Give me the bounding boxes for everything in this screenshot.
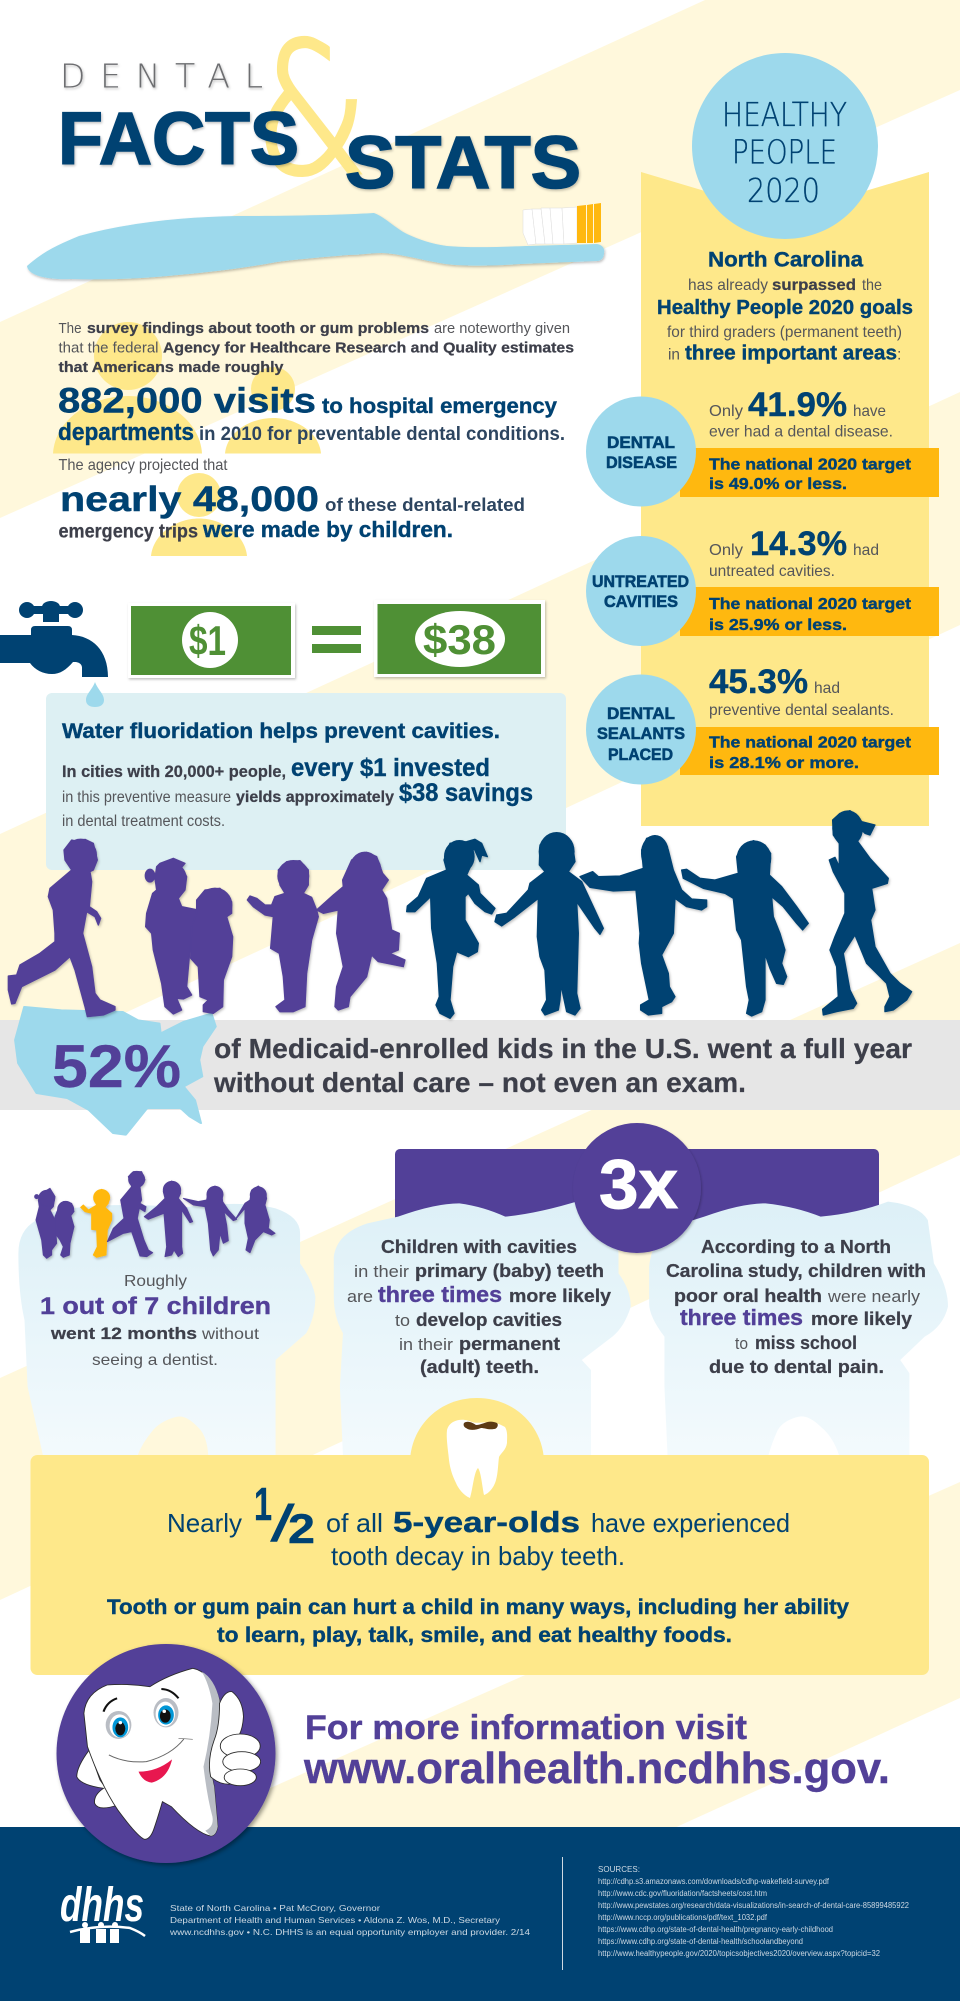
stat row: dental disease: DENTAL: [607, 433, 675, 452]
mascot left arm: [77, 1750, 118, 1808]
call to action: more information: For more information visit: [305, 1709, 747, 1747]
stat row: dental sealants placed: The national 2020 target: [709, 734, 912, 752]
grey band: [0, 1020, 960, 1110]
silhouette: small child: [191, 888, 233, 1013]
text block: survey findings intro: to hospital emergency: [322, 395, 557, 418]
panel: water fluoridation: every $1 invested: [291, 754, 490, 782]
stat: 52 percent Medicaid: [52, 1033, 912, 1100]
stat row: untreated cavities: The national 2020 target: [709, 596, 912, 613]
panel: tooth 3: [649, 1202, 948, 1455]
text block: 1 out of 7 children: 1 out of 7 children: [40, 1293, 271, 1320]
stat row: dental disease: have: [853, 403, 886, 420]
silhouette: running child: [8, 839, 115, 1017]
text block: children with cavities: in their: [399, 1335, 453, 1354]
text block: North Carolina summary: has already: [688, 277, 768, 294]
footer sources: http://www.nccp.org/publications/pdf/text_1032.pdf: [598, 1913, 768, 1922]
heading circle: Healthy People 2020: 2020: [747, 171, 820, 210]
text: one half of 5-year-olds: /: [270, 1495, 296, 1553]
icon: one dollar bill: [128, 603, 295, 678]
text block: 1 out of 7 children: [40, 1273, 271, 1369]
stat row: dental disease: DISEASE: [606, 453, 677, 472]
stat row: dental sealants placed: PLACED: [608, 745, 673, 764]
panel: water fluoridation: In cities with 20,000+ people,: [62, 763, 286, 781]
icon group: yellow people behind intro text: [53, 322, 321, 556]
panel: tooth 1: [18, 1204, 315, 1455]
icon: decayed tooth: [447, 1420, 507, 1498]
stat row: dental disease: The national 2020 target: [709, 456, 912, 474]
text block: 1 out of 7 children: without: [201, 1326, 260, 1343]
silhouette: girl with ponytail: [407, 839, 495, 1018]
footer sources: https://www.cdhp.org/state-of-dental-health/schoolandbeyond: [598, 1937, 803, 1946]
badge: 3x circle: 3x: [599, 1145, 678, 1223]
text block: survey findings intro: The: [58, 320, 82, 337]
silhouette: child reaching left: [580, 836, 707, 1015]
text block: North Carolina summary: North Carolina: [708, 248, 863, 272]
text block: North Carolina summary: three important areas: [685, 342, 897, 364]
text block: children with cavities: develop cavities: [416, 1310, 562, 1330]
panel: water fluoridation: in dental treatment costs.: [62, 813, 225, 830]
silhouettes: row of children: [8, 811, 912, 1018]
text block: North Carolina summary: Healthy People 2020 goals: [657, 297, 913, 319]
title: [58, 6, 581, 215]
panel: water fluoridation: $38 savings: [399, 779, 533, 807]
text block: North Carolina study: were nearly: [827, 1287, 921, 1306]
stat row: dental disease: ever had a dental disease.: [709, 424, 893, 441]
heading circle: Healthy People 2020: [692, 53, 878, 239]
logo: DHHS: [60, 1879, 145, 1943]
text block: survey findings intro: emergency trips: [58, 522, 198, 542]
text: one half of 5-year-olds: of all: [326, 1508, 383, 1538]
footer sources: http://cdhp.s3.amazonaws.com/downloads/cdhp-wakefield-survey.pdf: [598, 1877, 830, 1886]
stat row: dental sealants placed: SEALANTS: [597, 724, 685, 743]
text block: children with cavities: in their: [354, 1262, 409, 1281]
text block: survey findings intro: are noteworthy given: [434, 320, 570, 337]
text block: children with cavities: three times: [378, 1282, 502, 1307]
title word: facts: FACTS: [58, 97, 299, 180]
stat row: untreated cavities: 14.3%: [750, 525, 847, 563]
icon: thirty-eight dollar bill: $38: [423, 616, 496, 663]
stat row: dental disease: is 49.0% or less.: [709, 476, 847, 493]
mascot thumbs-up hand: [209, 1692, 261, 1786]
text block: survey findings intro: were made by children.: [202, 517, 453, 542]
icon: one dollar bill: $1: [189, 617, 226, 664]
stat row: dental disease: [586, 386, 939, 506]
footer credits: State of North Carolina • Pat McCrory, Governor: [170, 1903, 380, 1913]
icon: map of the United States: [15, 1007, 216, 1135]
text block: North Carolina study: [666, 1237, 926, 1377]
silhouette: child facing forward: [495, 833, 603, 1015]
text block: North Carolina study: due to dental pain.: [709, 1357, 884, 1377]
stat row: untreated cavities: CAVITIES: [604, 592, 678, 611]
panel: water fluoridation: in this preventive measure: [62, 789, 231, 806]
text: one half of 5-year-olds: Nearly: [167, 1508, 242, 1538]
icon: smiling tooth mascot: [56, 1644, 276, 1863]
icon: equals sign: [312, 626, 361, 653]
footer background: [0, 1827, 960, 2001]
footer sources: http://www.healthypeople.gov/2020/topicsobjectives2020/overview.aspx?topicid=32: [598, 1949, 881, 1958]
stat row: dental sealants placed: is 28.1% or more.: [709, 755, 859, 772]
stat row: untreated cavities: had: [853, 542, 879, 559]
text block: North Carolina summary: the: [862, 277, 882, 294]
text block: children with cavities: Children with cavities: [381, 1237, 577, 1257]
text block: North Carolina summary: surpassed: [772, 277, 856, 294]
text: one half of 5-year-olds: [167, 1478, 790, 1571]
footer credits: www.ncdhhs.gov • N.C. DHHS is an equal opportunity employer and provider. 2/14: [169, 1927, 530, 1937]
panel: water fluoridation: [46, 693, 566, 870]
text block: North Carolina study: poor oral health: [674, 1286, 822, 1306]
title word: dental: DENTAL: [60, 56, 263, 96]
icon: toothbrush: [27, 203, 604, 279]
silhouette: child reaching left, walking: [682, 841, 808, 1016]
text: one half of 5-year-olds: have experienced: [591, 1508, 790, 1538]
text block: children with cavities: to: [395, 1311, 410, 1330]
text block: survey findings intro: departments: [58, 419, 194, 446]
stat: 52 percent Medicaid: of Medicaid-enrolled kids in the U.S. went a full year: [214, 1033, 912, 1064]
heading circle: Healthy People 2020: PEOPLE: [732, 132, 837, 172]
text block: survey findings intro: of these dental-related: [325, 495, 525, 515]
footer sources: http://www.pewstates.org/research/data-visualizations/in-search-of-dental-care-85899485922: [598, 1901, 910, 1910]
badge: 3x circle: [573, 1123, 701, 1253]
text: tooth or gum pain: Tooth or gum pain can hurt a child in many ways, including her ability: [107, 1596, 849, 1619]
stat: 52 percent Medicaid: 52%: [52, 1033, 181, 1100]
text block: North Carolina summary: :: [897, 346, 901, 364]
stat row: dental sealants placed: DENTAL: [607, 704, 675, 723]
footer sources: http://www.cdc.gov/fluoridation/factsheets/cost.htm: [598, 1889, 767, 1898]
silhouette: girl with pigtails: [145, 858, 198, 1014]
mascot mouth: [139, 1759, 172, 1783]
text block: children with cavities: permanent: [459, 1334, 560, 1354]
stat row: dental sealants placed: had: [814, 680, 840, 697]
ampersand: &: [255, 6, 367, 215]
text: one half of 5-year-olds: 1: [254, 1478, 272, 1530]
panel: water fluoridation: yields approximately: [236, 789, 394, 806]
panel: one half tooth decay: [30, 1398, 929, 1675]
stat row: untreated cavities: [586, 525, 939, 646]
stat: nearly 48,000: nearly 48,000: [60, 480, 319, 519]
mascot eyes: [106, 1698, 179, 1739]
silhouette: running girl: [823, 811, 912, 1015]
silhouette: girl with long hair: [317, 852, 405, 1010]
stat row: dental sealants placed: 45.3%: [709, 663, 808, 701]
text block: children with cavities: [347, 1237, 611, 1377]
text: one half of 5-year-olds: tooth decay in baby teeth.: [331, 1541, 625, 1571]
text block: North Carolina summary: [657, 248, 913, 364]
icon: faucet: [0, 601, 108, 677]
stat row: dental sealants placed: [586, 663, 939, 784]
silhouette: boy: [247, 861, 318, 1012]
footer sources: [598, 1865, 910, 1958]
text block: children with cavities: (adult) teeth.: [420, 1357, 539, 1377]
banner: 3x purple bar: [395, 1149, 879, 1239]
stat row: dental disease: 41.9%: [748, 386, 847, 424]
text block: survey findings intro: survey findings about tooth or gum problems: [87, 320, 429, 337]
footer sources: SOURCES:: [598, 1865, 640, 1874]
logo: DHHS: dhhs: [60, 1879, 144, 1932]
footer sources: https://www.cdhp.org/state-of-dental-health/pregnancy-early-childhood: [598, 1925, 833, 1934]
footer credits: Department of Health and Human Services • Aldona Z. Wos, M.D., Secretary: [170, 1915, 501, 1925]
icon: seven mini children, one highlighted: [35, 1171, 275, 1258]
text block: North Carolina study: miss school: [755, 1333, 857, 1353]
title word: stats: STATS: [345, 121, 581, 204]
stat row: untreated cavities: untreated cavities.: [709, 563, 835, 580]
icon: thirty-eight dollar bill: [374, 600, 545, 677]
text: one half of 5-year-olds: 5-year-olds: [393, 1507, 580, 1539]
text block: children with cavities: are: [347, 1287, 373, 1306]
text block: North Carolina summary: in: [668, 346, 680, 364]
icon: water drop: [86, 682, 104, 707]
stat: 882,000 visits: 882,000 visits: [58, 382, 316, 420]
stat row: dental sealants placed: preventive dental sealants.: [709, 702, 894, 719]
text block: North Carolina summary: for third graders (permanent teeth): [667, 324, 902, 341]
text block: survey findings intro: [58, 320, 574, 542]
mascot eyebrows and smile: [104, 1689, 193, 1762]
call to action: more information: [303, 1709, 890, 1793]
heading circle: Healthy People 2020: HEALTHY: [722, 95, 847, 134]
stat row: untreated cavities: is 25.9% or less.: [709, 617, 847, 634]
text block: North Carolina study: more likely: [811, 1309, 912, 1329]
stat row: untreated cavities: Only: [709, 542, 743, 559]
text: tooth or gum pain: to learn, play, talk, smile, and eat healthy foods.: [217, 1624, 732, 1647]
text block: North Carolina study: Carolina study, children with: [666, 1261, 926, 1281]
text block: survey findings intro: The agency projected that: [58, 457, 228, 474]
text block: North Carolina study: According to a North: [701, 1237, 891, 1257]
footer credits: [169, 1903, 530, 1937]
mascot tooth body: [84, 1668, 220, 1839]
text block: 1 out of 7 children: went 12 months: [50, 1324, 197, 1343]
text: tooth or gum pain: [107, 1596, 849, 1647]
text block: North Carolina study: three times: [680, 1305, 803, 1330]
call to action: more information: www.oralhealth.ncdhhs.gov.: [303, 1744, 890, 1793]
text block: 1 out of 7 children: Roughly: [124, 1273, 187, 1290]
text block: children with cavities: primary (baby) teeth: [415, 1261, 604, 1281]
text block: children with cavities: more likely: [509, 1286, 611, 1306]
stat row: untreated cavities: UNTREATED: [592, 572, 689, 591]
panel: Healthy People 2020: [586, 53, 939, 826]
text block: 1 out of 7 children: seeing a dentist.: [92, 1352, 218, 1369]
text block: survey findings intro: Agency for Healthcare Research and Quality estimates: [163, 340, 574, 356]
stat row: dental disease: Only: [709, 403, 743, 420]
text: one half of 5-year-olds: 2: [288, 1505, 315, 1552]
text block: survey findings intro: in 2010 for preventable dental conditions.: [199, 424, 565, 445]
stat: 52 percent Medicaid: without dental care – not even an exam.: [213, 1067, 746, 1098]
text block: survey findings intro: that the federal: [58, 340, 158, 356]
text block: survey findings intro: that Americans made roughly: [58, 359, 284, 376]
panel: water fluoridation: Water fluoridation helps prevent cavities.: [62, 720, 500, 743]
panel: tooth 2: [334, 1200, 631, 1455]
text block: North Carolina study: to: [735, 1334, 748, 1353]
